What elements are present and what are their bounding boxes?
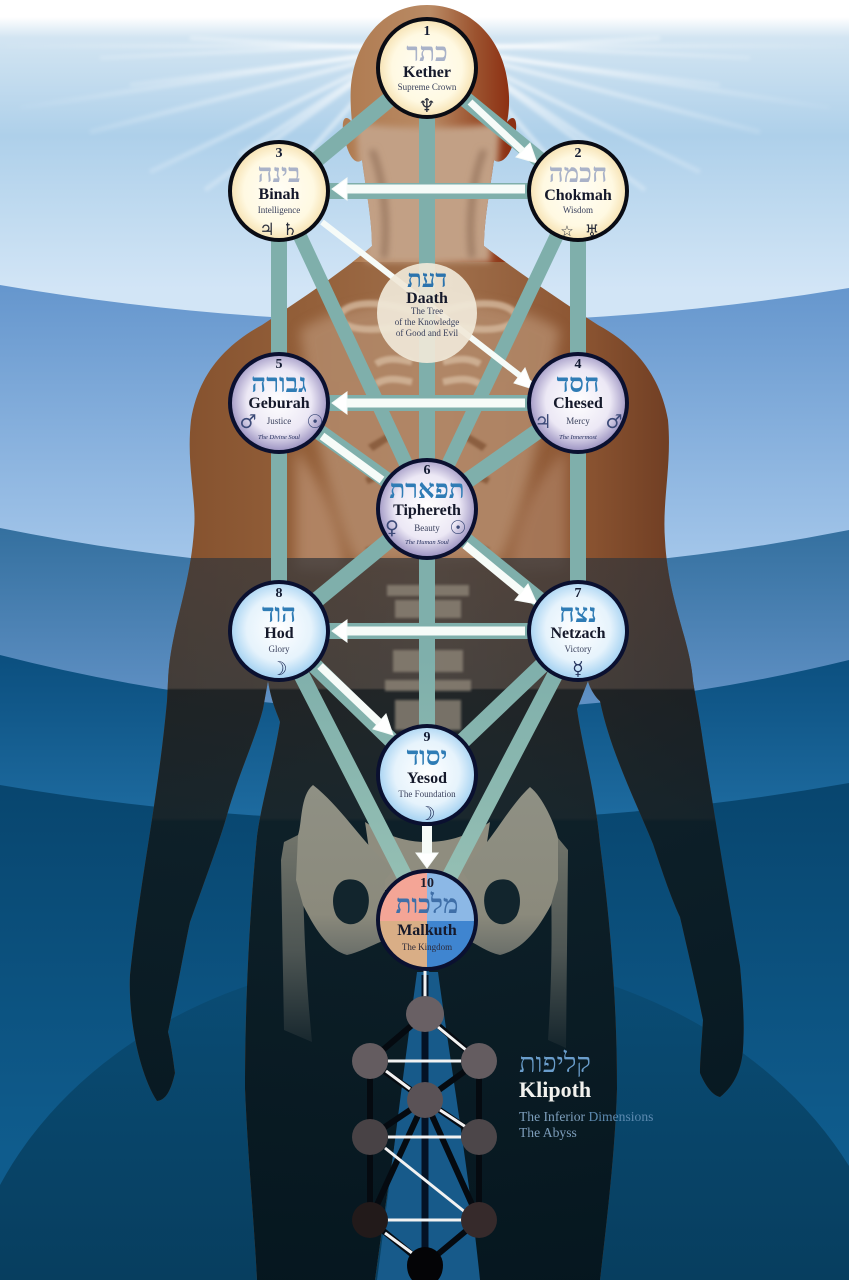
klipoth caption: Klipoth — [519, 1077, 591, 1102]
sephirah 2: Chokmah — [529, 142, 627, 240]
upper back muscles — [300, 300, 560, 560]
sephirah: Daath: Daath — [406, 290, 448, 307]
spine vertebrae — [385, 585, 471, 730]
sephirah 5: Geburah: Geburah — [248, 395, 310, 412]
sephirah 6: Tiphereth: 6 — [424, 463, 430, 478]
human figure seen from behind — [120, 0, 760, 1280]
neck and skull base muscles — [356, 122, 500, 262]
sephirah 1: Kether — [378, 19, 476, 117]
sephirah 5: Geburah — [230, 354, 328, 452]
shadow overlay over lower body — [120, 558, 760, 1280]
sephirah 2: Chokmah: חכמה — [549, 159, 607, 188]
sephirah: Daath: דעת — [407, 267, 447, 293]
collar bones and ribs — [338, 304, 518, 384]
sephirah 8: Hod: הוד — [262, 599, 296, 628]
blue gap between the legs — [377, 972, 480, 1280]
sephirah 2: Chokmah: Wisdom — [563, 205, 593, 215]
sephirah 6: Tiphereth — [378, 460, 476, 558]
sephirah 1: Kether: Supreme Crown — [398, 82, 457, 92]
sephirah 10: Malkuth, four elemental quadrants: 10 — [420, 876, 434, 891]
sephirah 9: Yesod: יסוד — [407, 742, 447, 771]
klipoth caption: קליפות — [519, 1048, 591, 1078]
sephirah 4: Chesed: The Innermost — [559, 434, 597, 441]
sephirah 9: Yesod: ☽ — [418, 803, 436, 825]
klipoth caption: The Inferior Dimensions — [519, 1109, 653, 1124]
sephirah 7: Netzach — [529, 582, 627, 680]
sephirah 2: Chokmah: ☆ — [560, 222, 574, 240]
sephirah 9: Yesod — [378, 726, 476, 825]
sephirah 5: Geburah: ☉ — [306, 411, 324, 433]
sephirah 2: Chokmah: Chokmah — [544, 187, 612, 204]
sephirah 1: Kether: 1 — [424, 24, 430, 39]
sephirah 7: Netzach: נצח — [559, 599, 597, 628]
sephirah 3: Binah: 3 — [276, 146, 282, 161]
pelvis: femurs — [281, 835, 312, 1042]
sephirah 6: Tiphereth: The Human Soul — [405, 539, 449, 546]
klipoth nodes — [352, 996, 497, 1280]
sephirah 4: Chesed: חסד — [557, 369, 599, 398]
klipoth white channels — [385, 970, 466, 1253]
sephirah: Daath: of Good and Evil — [396, 328, 459, 338]
light rays radiating from the crown — [5, 38, 845, 205]
sephirah 6: Tiphereth: Beauty — [414, 523, 440, 533]
lightning flash: white arrows descending the tree — [320, 102, 537, 868]
sephirah 4: Chesed: 4 — [574, 357, 582, 372]
sephirah 7: Netzach: ☿ — [572, 658, 584, 680]
sephirah 2: Chokmah: 2 — [574, 146, 582, 161]
klipoth: inverted tree below Malkuth — [352, 970, 497, 1280]
sephirah 10: Malkuth, four elemental quadrants — [378, 871, 476, 969]
sephirah 1: Kether: כתר — [406, 38, 448, 67]
sephirah: Daath: of the Knowledge — [395, 317, 459, 327]
sephirah 3: Binah: בינה — [258, 159, 300, 188]
klipoth caption — [519, 1048, 653, 1140]
sephirah 10: Malkuth, four elemental quadrants: Malkuth — [397, 922, 457, 939]
sephirah 5: Geburah: ♂ — [239, 411, 257, 433]
pelvis: sacrum — [365, 822, 490, 890]
sephirah 8: Hod — [230, 582, 328, 680]
sephirah 5: Geburah: Justice — [267, 416, 291, 426]
klipoth caption: The Abyss — [519, 1125, 577, 1140]
sephirah 1: Kether: ♆ — [418, 95, 436, 117]
pelvis: right ilium — [460, 787, 558, 955]
sephirah 8: Hod: 8 — [276, 586, 282, 601]
sephirah 4: Chesed — [529, 354, 627, 452]
sephirah 8: Hod: Hod — [264, 625, 294, 642]
sephirah 5: Geburah: The Divine Soul — [258, 434, 300, 441]
sephirah 3: Binah — [230, 142, 328, 240]
pelvis holes — [333, 879, 369, 924]
sephirotic paths: teal channels — [279, 68, 578, 920]
sephirah 4: Chesed: Chesed — [553, 395, 603, 412]
sephirah: Daath — [377, 263, 477, 363]
sephirah 3: Binah: ♄ — [282, 220, 298, 240]
sephirah 4: Chesed: ♂ — [605, 411, 623, 433]
sephirah 8: Hod: ☽ — [270, 658, 288, 680]
sephirah 3: Binah: Binah — [259, 186, 300, 203]
pelvis: left ilium — [296, 785, 385, 955]
sephirah 1: Kether: Kether — [403, 64, 451, 81]
sephirah 9: Yesod: Yesod — [407, 770, 447, 787]
sephirah 5: Geburah: 5 — [276, 357, 282, 372]
sephirah 6: Tiphereth: Tiphereth — [393, 502, 461, 519]
sephirah 6: Tiphereth: ☉ — [449, 517, 467, 539]
sephirah 7: Netzach: Netzach — [550, 625, 606, 642]
sephirah 9: Yesod: The Foundation — [398, 789, 456, 799]
sephirah 7: Netzach: 7 — [574, 586, 582, 601]
sephirah 10: Malkuth, four elemental quadrants: The Kingdom — [402, 942, 452, 952]
sephirah 9: Yesod: 9 — [424, 730, 430, 745]
sephirah 10: Malkuth, four elemental quadrants: מלכות — [396, 890, 458, 919]
sephirah 3: Binah: Intelligence — [258, 205, 300, 215]
sephirah 6: Tiphereth: תפארת — [389, 475, 465, 504]
sephirah 8: Hod: Glory — [268, 644, 290, 654]
klipoth dark channels — [370, 975, 479, 1265]
sephirah 3: Binah: ♃ — [259, 220, 275, 240]
sephirah 5: Geburah: גבורה — [251, 369, 307, 398]
sephirah 4: Chesed: ♃ — [534, 411, 552, 433]
sephirah 6: Tiphereth: ♀ — [385, 517, 399, 539]
sephirah: Daath: The Tree — [411, 306, 443, 316]
sephirah 4: Chesed: Mercy — [566, 416, 590, 426]
sephirah 7: Netzach: Victory — [565, 644, 592, 654]
sephirah 2: Chokmah: ♅ — [585, 221, 599, 240]
